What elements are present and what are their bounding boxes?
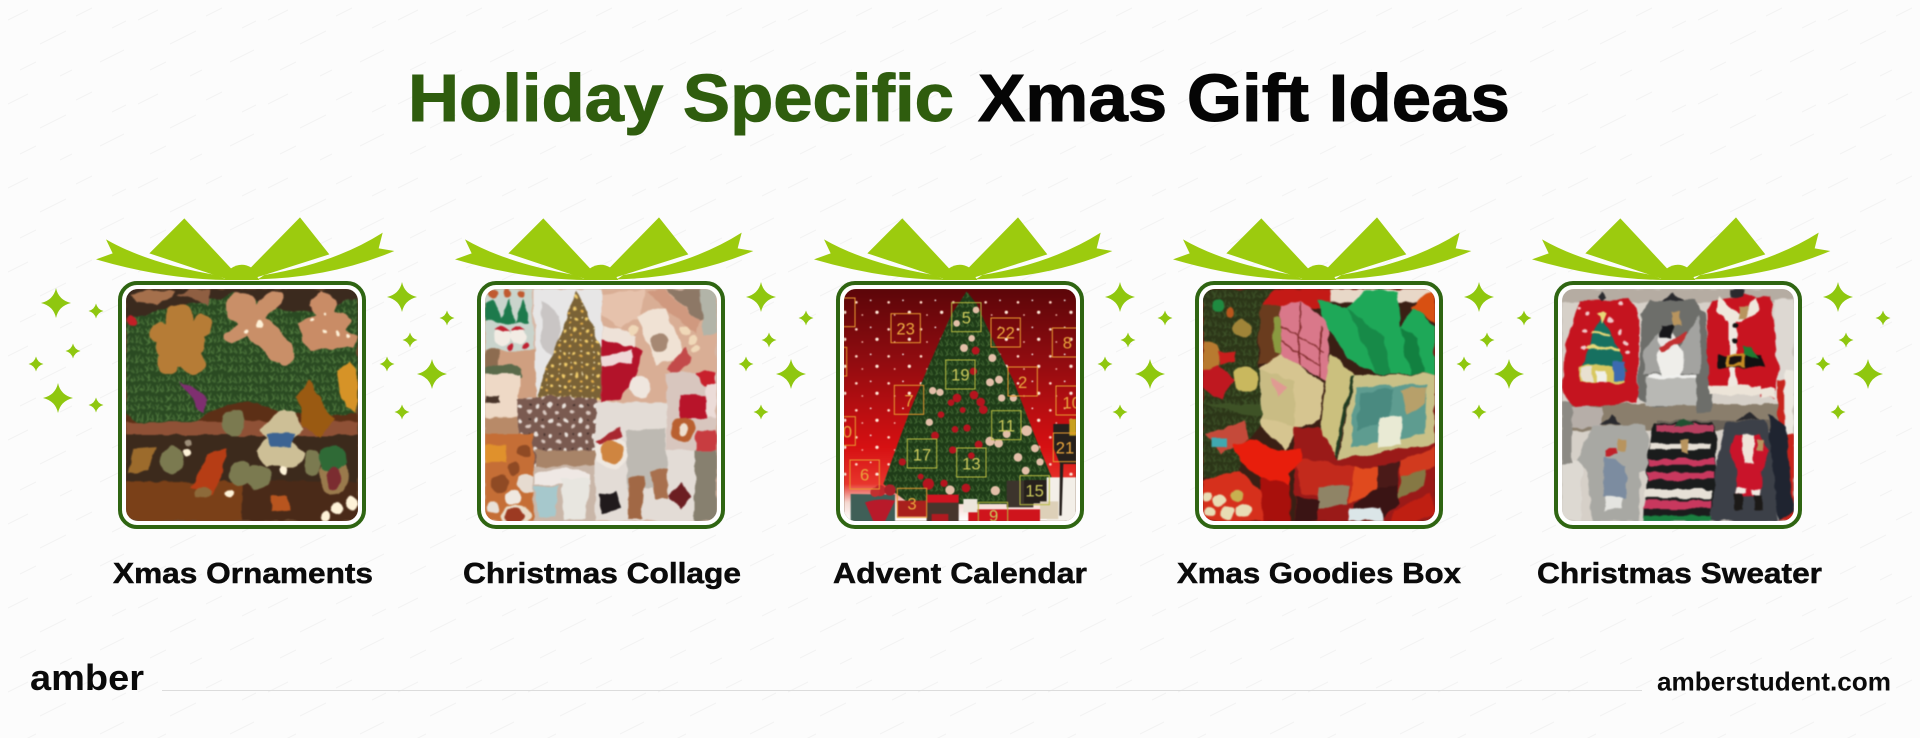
- panel: Xmas Goodies Box: [1173, 218, 1472, 590]
- framed photo: advent calendar: 7: [904, 392, 914, 411]
- icon: gift bow: [1173, 218, 1472, 280]
- framed photo: advent calendar: 3: [907, 495, 917, 514]
- framed photo: advent calendar: 2: [1018, 373, 1027, 392]
- framed photo: advent calendar: 13: [962, 454, 981, 473]
- footer divider: [162, 690, 1642, 691]
- label: Advent Calendar: Advent Calendar: [833, 558, 1087, 590]
- title: Xmas Gift Ideas: [978, 61, 1510, 136]
- label: Xmas Goodies Box: Xmas Goodies Box: [1177, 558, 1461, 590]
- sparkles: after first gift: [380, 282, 454, 420]
- framed photo: goodies box: [1195, 281, 1443, 529]
- title: [408, 61, 1510, 136]
- label: Christmas Collage: Christmas Collage: [463, 558, 741, 590]
- sparkles: after third gift: [1098, 282, 1172, 420]
- label: Christmas Sweater: Christmas Sweater: [1537, 558, 1822, 590]
- sparkles: after fourth gift: [1456, 282, 1532, 420]
- framed photo: advent calendar: [836, 281, 1084, 529]
- framed photo: advent calendar: 22: [996, 324, 1015, 343]
- framed photo: advent calendar: 11: [998, 417, 1015, 436]
- framed photo: advent calendar: 23: [896, 320, 915, 339]
- framed photo: advent calendar: 21: [1056, 438, 1074, 457]
- icon: gift bow: [96, 218, 394, 280]
- sparkles: after second gift: [738, 282, 814, 420]
- framed photo: advent calendar: 17: [913, 446, 931, 465]
- framed photo: advent calendar: 15: [1025, 482, 1044, 501]
- framed photo: advent calendar: 6: [860, 466, 869, 485]
- icon: gift bow: [455, 218, 754, 280]
- framed photo: advent calendar: 19: [951, 366, 970, 385]
- sparkles: after fifth gift: [1816, 282, 1890, 420]
- sparkles: left of first gift: [28, 288, 104, 413]
- icon: gift bow: [814, 218, 1112, 280]
- icon: gift bow: [1532, 218, 1830, 280]
- footer: website: amberstudent.com: [1657, 666, 1891, 696]
- framed photo: collage: [477, 281, 725, 529]
- framed photo: advent calendar: 8: [1063, 334, 1072, 353]
- framed photo: sweaters: [1554, 281, 1802, 529]
- framed photo: advent calendar: 5: [962, 308, 971, 327]
- footer: amber logo: amber: [30, 657, 144, 698]
- title: Holiday Specific: [408, 61, 954, 136]
- panel: Christmas Collage: [455, 218, 754, 590]
- panel: Christmas Sweater: [1532, 218, 1830, 590]
- label: Xmas Ornaments: Xmas Ornaments: [113, 558, 373, 590]
- panel: Advent Calendar: [814, 218, 1112, 590]
- panel: Xmas Ornaments: [96, 218, 394, 590]
- framed photo: ornaments: [118, 281, 366, 529]
